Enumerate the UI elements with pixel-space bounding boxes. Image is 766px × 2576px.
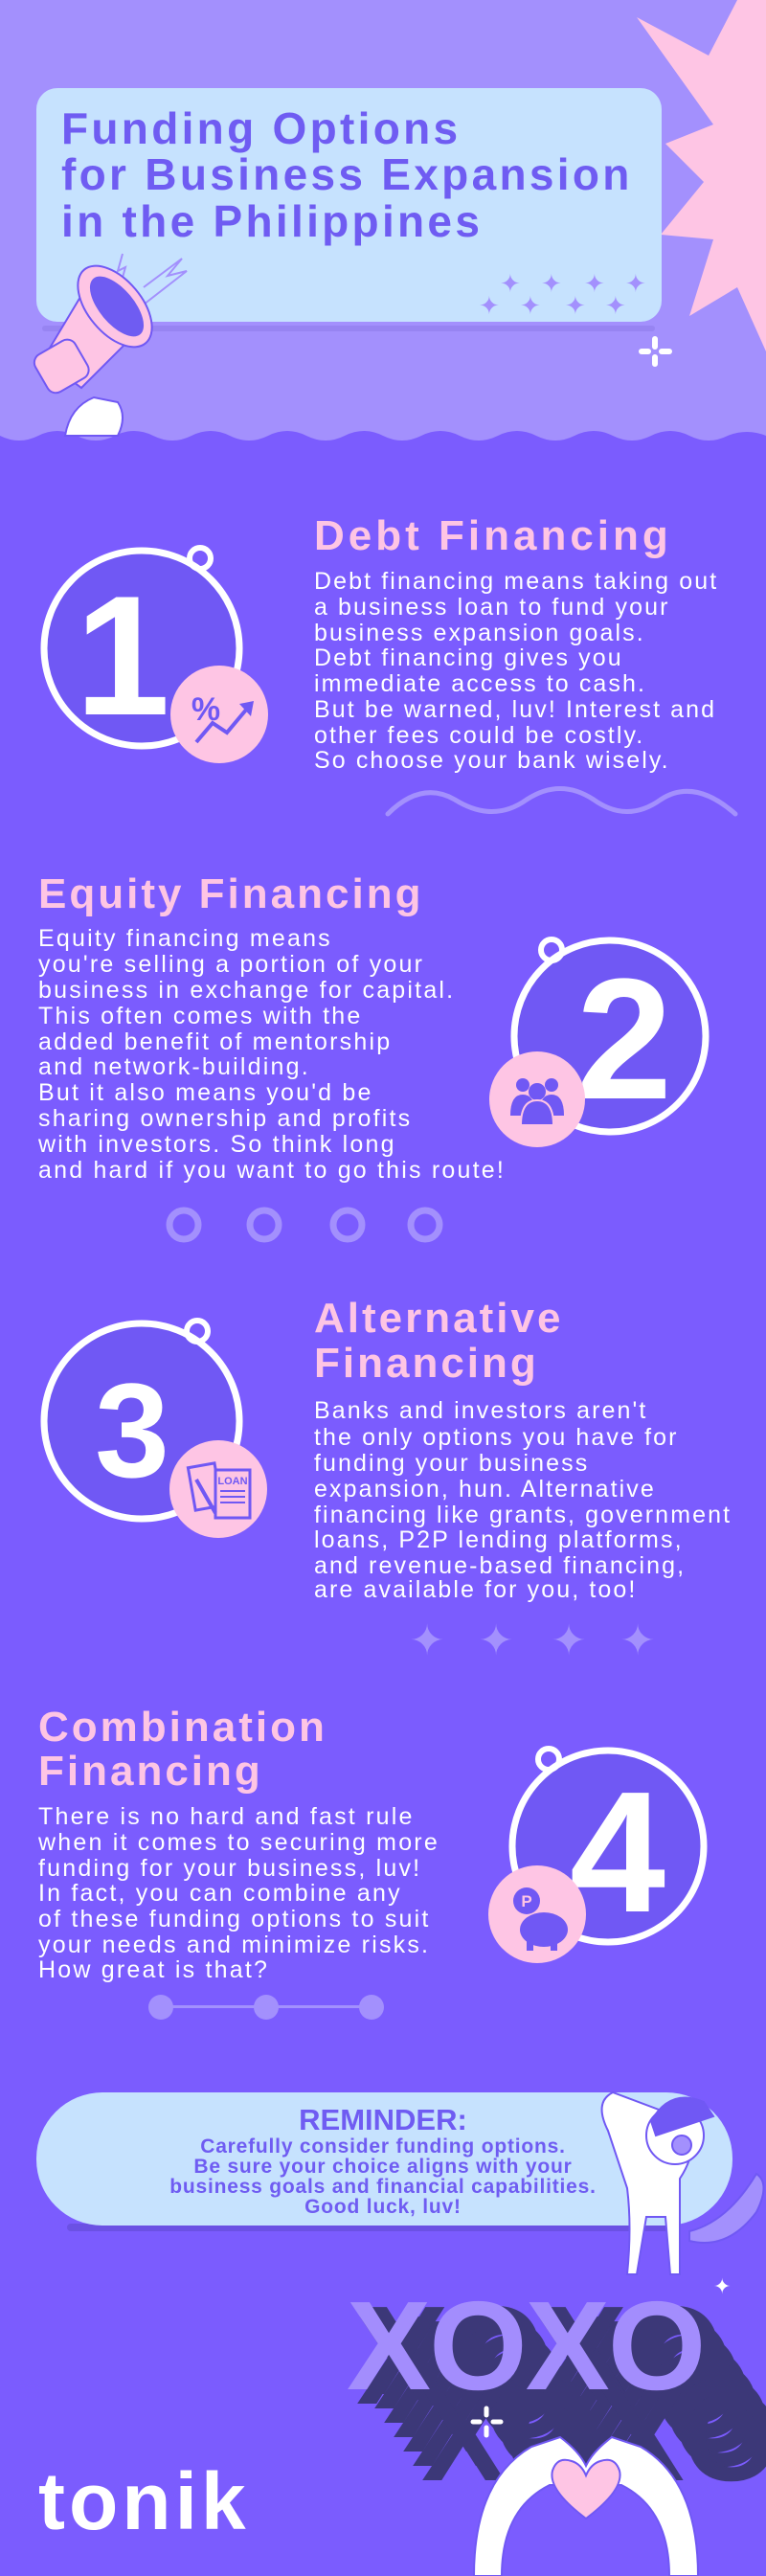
badge 2: [489, 939, 706, 1147]
text block: and hard if you want to go this route!: [38, 1157, 506, 1184]
text block: expansion, hun. Alternative: [314, 1476, 656, 1503]
badge 3: 3: [95, 1355, 169, 1505]
text block: Debt financing gives you: [314, 644, 623, 671]
text block: [314, 568, 718, 774]
text block: This often comes with the: [38, 1003, 362, 1029]
badge 2: 2: [576, 943, 672, 1136]
stars row decoration: [410, 1617, 655, 1664]
text block: business in exchange for capital.: [38, 977, 455, 1004]
reminder callout: business goals and financial capabilities.: [169, 2176, 597, 2198]
section 1: debt financing: [44, 512, 718, 774]
text block: immediate access to cash.: [314, 670, 646, 697]
stars decoration: ✦: [541, 269, 562, 298]
stars decoration: [479, 269, 646, 320]
icon: people: [489, 1051, 585, 1147]
text block: business expansion goals.: [314, 620, 645, 646]
badge 4: 4: [570, 1756, 665, 1949]
wavy line decoration: [388, 789, 735, 814]
reminder callout: REMINDER:: [299, 2103, 467, 2136]
title: [61, 103, 633, 246]
text block: other fees could be costly.: [314, 722, 644, 749]
mascot: raccoon: [602, 2092, 764, 2274]
text block: the only options you have for: [314, 1424, 679, 1451]
reminder callout: Carefully consider funding options.: [200, 2135, 566, 2158]
section 4: combination financing: [37, 1704, 704, 1983]
sparkle white: [642, 339, 669, 364]
text block: Banks and investors aren't: [314, 1397, 647, 1424]
text block: financing like grants, government: [314, 1502, 732, 1528]
text block: So choose your bank wisely.: [314, 747, 670, 774]
reminder callout: Good luck, luv!: [304, 2196, 462, 2218]
text block: funding for your business, luv!: [38, 1855, 421, 1882]
stars row decoration: ✦: [552, 1617, 586, 1664]
text block: [37, 1803, 439, 1983]
icon: megaphone: [31, 253, 187, 436]
text block: and network-building.: [38, 1053, 310, 1080]
heading: Alternative: [314, 1295, 563, 1342]
hands heart: [474, 2437, 698, 2576]
badge 1: [44, 548, 268, 763]
text block: [37, 925, 506, 1184]
stars row decoration: ✦: [479, 1617, 513, 1664]
header background with wave: [0, 0, 766, 441]
text block: [314, 1397, 732, 1603]
XOXO: [347, 2275, 766, 2507]
icon: percent growth: [170, 666, 268, 763]
XOXO: XOXO: [364, 2280, 721, 2421]
text block: sharing ownership and profits: [38, 1105, 412, 1132]
heading: Financing: [38, 1748, 263, 1795]
XOXO: XOXO: [383, 2309, 740, 2450]
section 2: equity financing: [37, 870, 706, 1184]
XOXO: XOXO: [347, 2275, 704, 2416]
title: in the Philippines: [61, 196, 483, 246]
text block: Equity financing means: [38, 925, 332, 952]
stars decoration: ✦: [479, 291, 500, 320]
icon: percent growth: %: [192, 691, 220, 728]
sparkle near xoxo: ✦: [713, 2274, 731, 2298]
circle row decoration: [169, 1210, 439, 1239]
dotted line decoration: [148, 1995, 384, 2020]
XOXO: XOXO: [373, 2294, 731, 2435]
XOXO: XOXO: [393, 2323, 750, 2464]
stars decoration: ✦: [625, 269, 646, 298]
text block: your needs and minimize risks.: [38, 1932, 430, 1958]
logo: tonik: tonik: [38, 2456, 250, 2546]
XOXO: XOXO: [402, 2338, 759, 2478]
title: Funding Options: [61, 103, 461, 153]
stars decoration: ✦: [605, 291, 626, 320]
text block: of these funding options to suit: [38, 1906, 431, 1932]
stars decoration: ✦: [500, 269, 521, 298]
text block: funding your business: [314, 1450, 589, 1477]
text block: added benefit of mentorship: [38, 1028, 392, 1055]
icon: loan document: [169, 1440, 267, 1538]
starburst: [637, 0, 766, 351]
stars row decoration: ✦: [620, 1617, 655, 1664]
heading: Financing: [314, 1340, 539, 1387]
section 3: alternative financing: [44, 1295, 732, 1603]
text block: with investors. So think long: [37, 1131, 396, 1158]
text block: loans, P2P lending platforms,: [314, 1526, 684, 1553]
badge 3: [44, 1321, 267, 1538]
text block: There is no hard and fast rule: [38, 1803, 415, 1830]
text block: But it also means you'd be: [38, 1079, 373, 1106]
title: for Business Expansion: [61, 149, 633, 199]
heading: Equity Financing: [38, 870, 423, 917]
heading: Combination: [38, 1704, 327, 1751]
stars decoration: ✦: [565, 291, 586, 320]
heading: Debt Financing: [314, 512, 672, 559]
text block: How great is that?: [38, 1956, 269, 1983]
XOXO: XOXO: [356, 2290, 713, 2430]
text block: But be warned, luv! Interest and: [314, 696, 716, 723]
text block: you're selling a portion of your: [38, 951, 424, 978]
badge 1: 1: [75, 560, 170, 751]
badge 4: [488, 1749, 704, 1963]
heading: [314, 1295, 563, 1387]
stars decoration: ✦: [520, 291, 541, 320]
icon: piggy bank: P: [521, 1892, 532, 1910]
stars decoration: ✦: [584, 269, 605, 298]
icon: loan document: LOAN: [217, 1476, 248, 1487]
reminder callout: Be sure your choice aligns with your: [193, 2156, 573, 2178]
text block: Debt financing means taking out: [314, 568, 718, 595]
title box: [36, 88, 662, 331]
text block: a business loan to fund your: [314, 594, 670, 621]
text block: and revenue-based financing,: [314, 1552, 686, 1579]
XOXO: XOXO: [412, 2352, 766, 2493]
heading: [38, 1704, 327, 1795]
stars row decoration: ✦: [410, 1617, 444, 1664]
text block: In fact, you can combine any: [38, 1880, 402, 1907]
reminder callout: [36, 2092, 732, 2231]
text block: when it comes to securing more: [37, 1829, 439, 1856]
text block: are available for you, too!: [314, 1576, 637, 1603]
icon: piggy bank: [488, 1865, 586, 1963]
